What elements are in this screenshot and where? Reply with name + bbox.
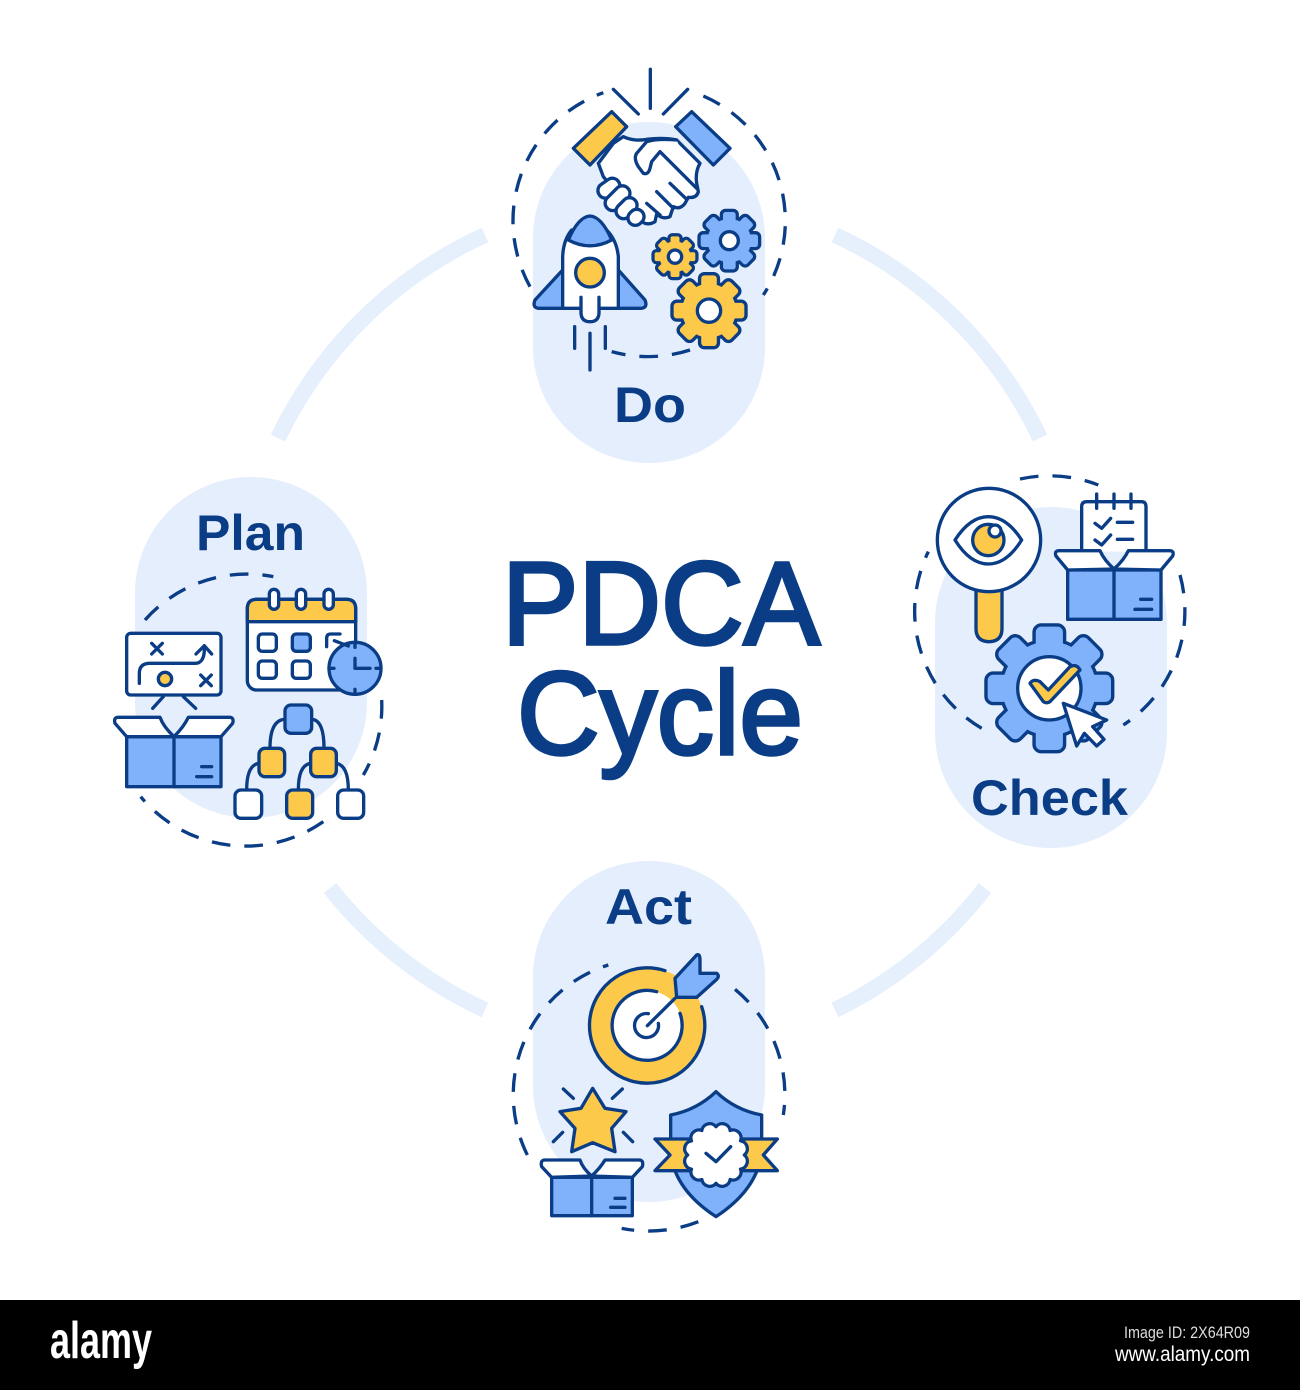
- dashed circle: [915, 476, 1185, 728]
- flow tree: [235, 705, 364, 818]
- spark lines: [613, 69, 688, 114]
- panel: Check: [915, 476, 1185, 848]
- Act icons: [513, 955, 785, 1231]
- clipboard and box: [1055, 494, 1173, 619]
- calendar with clock: [247, 589, 381, 694]
- magnifier with eye: [937, 488, 1041, 642]
- title: PDCA: [502, 538, 820, 670]
- star: [553, 1088, 633, 1152]
- title: Cycle: [517, 648, 803, 780]
- footer logo: alamy: [50, 1312, 152, 1370]
- Act label: Act: [605, 879, 692, 935]
- Check pill background: [935, 507, 1167, 848]
- panel: Plan: [115, 477, 382, 846]
- dashed circle: [141, 574, 382, 846]
- cycle ring arcs: [278, 235, 1040, 1010]
- footer bar: [0, 1300, 1300, 1390]
- Check icons: [915, 476, 1185, 750]
- dashed circle: [513, 93, 785, 357]
- dashed circle: [513, 965, 785, 1231]
- target with arrow: [589, 955, 718, 1083]
- Do icons: [513, 69, 785, 370]
- title: [502, 538, 820, 780]
- Plan label: Plan: [196, 505, 305, 561]
- handshake: [573, 112, 730, 228]
- open box: [115, 717, 233, 787]
- gear with check and cursor: [988, 627, 1111, 750]
- gears: [655, 212, 758, 346]
- website: www.alamy.com: [1114, 1343, 1250, 1366]
- rocket: [534, 216, 646, 370]
- shield with badge: [655, 1092, 777, 1217]
- panel: Act: [513, 861, 785, 1231]
- Plan icons: [115, 574, 382, 846]
- Act pill background: [533, 861, 765, 1202]
- panel: Do: [513, 69, 785, 463]
- strategy board: [127, 633, 221, 708]
- Check label: Check: [971, 770, 1128, 826]
- image id: Image ID: 2X64R09: [1124, 1323, 1250, 1342]
- Plan pill background: [135, 477, 367, 818]
- Do label: Do: [614, 377, 686, 433]
- open box: [541, 1160, 643, 1216]
- Do pill background: [533, 122, 765, 463]
